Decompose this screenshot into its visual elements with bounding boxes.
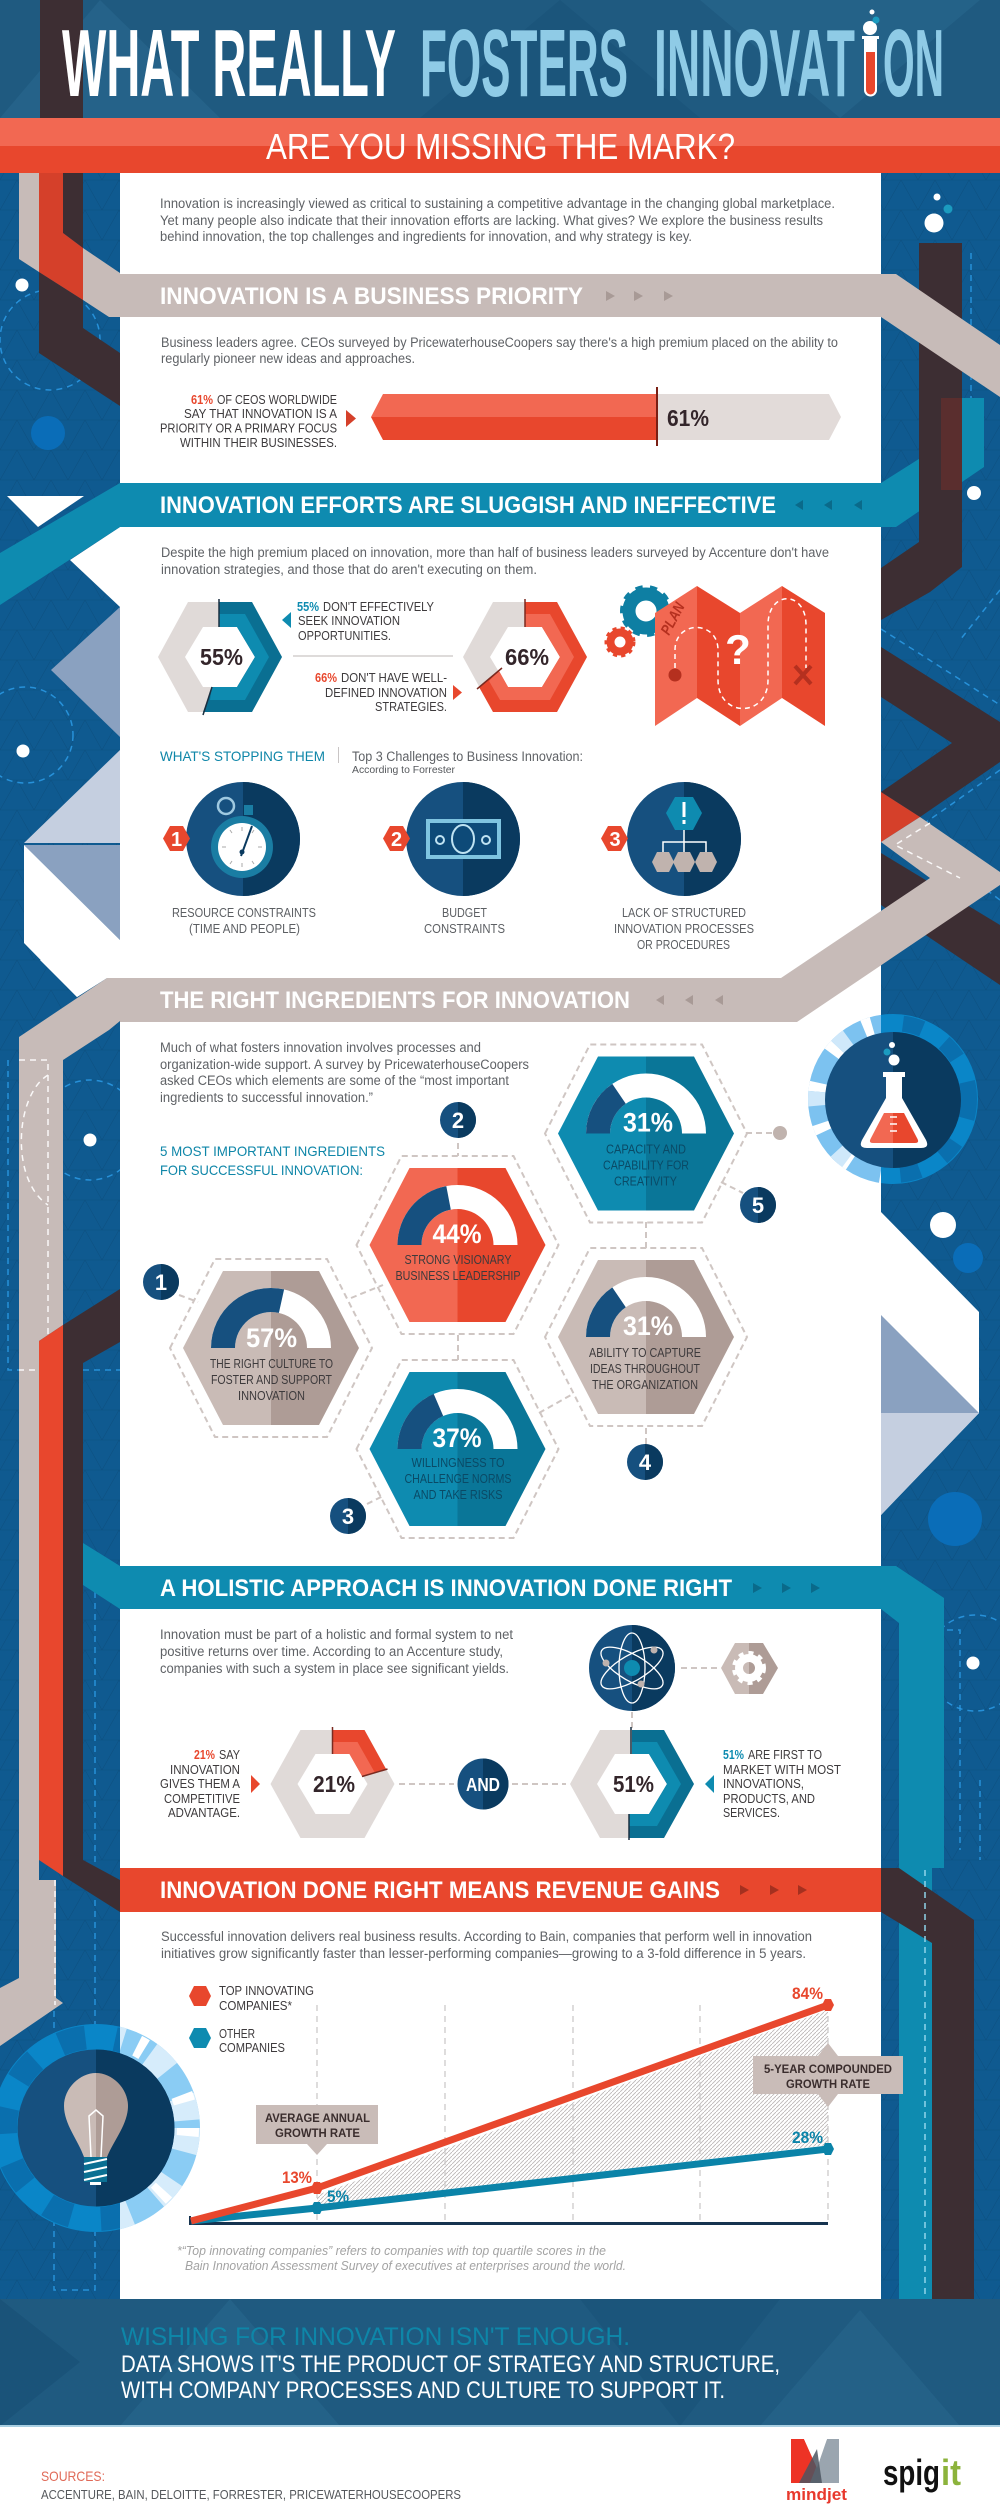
callout: 5-year compounded growth rate: 5-YEAR COMPOUNDED [764,2062,892,2076]
logo: mindjet: mindjet [786,2485,847,2504]
section 3 paragraph: Much of what fosters innovation involves processes and [160,1040,481,1055]
title: WHAT REALLY [62,10,396,117]
bar chart: 61 percent [371,387,841,446]
icon: stopwatch challenge 1: 1 [171,829,182,851]
subheading: 5 most important ingredients [160,1143,385,1178]
legend: COMPANIES [219,2040,285,2055]
callout: 51 percent text [705,1747,841,1820]
section 2 paragraph [161,545,829,577]
callout: 66 percent text [315,670,462,714]
callout: 61 percent of CEOs [160,392,356,450]
callout: 51 percent text: ARE FIRST TO [748,1747,822,1762]
callout: 61 percent of CEOs: OF CEOS WORLDWIDE [217,392,337,407]
hexagon: 44 percent visionary leadership [356,1156,558,1334]
callout: 21 percent text: SAY [219,1747,240,1762]
logo: spigit: spig [883,2452,940,2493]
number badges: 1 [155,1270,167,1295]
section 5 paragraph: Successful innovation delivers real business results. According to Bain, companies that perform well in innovation [161,1929,812,1944]
chart: 51 percent hexagon: 51% [613,1771,654,1797]
callout: 21 percent text [160,1747,260,1820]
hexagon: 31 percent capture ideas: IDEAS THROUGHOUT [590,1361,700,1376]
legend: OTHER [219,2026,255,2041]
subheading: what's stopping them: Top 3 Challenges to Business Innovation: [352,749,583,764]
icon: org chart challenge 3 [601,782,741,896]
section 4 paragraph [160,1627,513,1676]
chart: 21 percent hexagon [270,1727,394,1838]
section 4 paragraph: Innovation must be part of a holistic and formal system to net [160,1627,513,1642]
decorative dots [16,194,983,1670]
badge: and: AND [466,1775,500,1795]
callout: 21 percent text: 21% [194,1747,215,1762]
callout: 61 percent of CEOs: PRIORITY OR A PRIMARY FOCUS [160,420,337,436]
subtitle band [0,118,1000,173]
icon: banknote challenge 2: 2 [391,829,402,851]
callout: 55 percent text: SEEK INNOVATION [298,613,400,628]
chart: 55 percent hexagon: 55% [200,644,243,670]
line chart: growth: 13% [282,2168,312,2187]
icon: test tube in title [862,10,880,96]
number badges: 5 [752,1193,764,1218]
section 4 paragraph: positive returns over time. According to an Accenture study, [160,1644,503,1659]
callout: average annual growth rate: AVERAGE ANNUAL [265,2111,370,2125]
connector dashes [179,1126,787,1504]
hexagon: 57 percent right culture [170,1259,372,1437]
chart: 66 percent hexagon: 66% [505,644,549,670]
chart: 21 percent hexagon: 21% [313,1771,355,1797]
section 4 heading band [83,1543,881,1609]
section 3 paragraph [160,1040,529,1105]
challenge labels: RESOURCE CONSTRAINTS [172,905,316,920]
hexagon: 37 percent challenge norms: 37% [432,1423,482,1453]
number badges [143,1102,776,1534]
ribbon: grey zigzag leading to section three [120,817,1000,1022]
chart: 66 percent hexagon [463,599,587,712]
section 5 heading band: INNOVATION DONE RIGHT MEANS REVENUE GAINS [160,1877,720,1904]
section 1 heading band: INNOVATION IS A BUSINESS PRIORITY [160,283,583,310]
connector dashes: holistic [399,1668,717,1784]
intro text: Yet many people also indicate that their innovation efforts are lacking. What gives? We explore the business results [160,213,823,228]
footnote: *“Top innovating companies” refers to companies with top quartile scores in the [177,2243,606,2258]
subheading: 5 most important ingredients: 5 MOST IMPORTANT INGREDIENTS [160,1143,385,1159]
hexagon: 37 percent challenge norms: CHALLENGE NORMS [404,1471,512,1486]
section 3 paragraph: asked CEOs which elements are some of the “most important [160,1073,509,1088]
decorative dot over right band [967,486,981,500]
footnote [177,2243,626,2273]
hexagon: 37 percent challenge norms: AND TAKE RISKS [414,1487,503,1502]
callout: 5-year compounded growth rate [753,2043,903,2107]
logo: mindjet [786,2439,847,2504]
section 5 heading band [120,1868,881,1912]
line chart: growth: 28% [792,2128,823,2147]
section 2 heading band [0,483,881,605]
hexagon: 44 percent visionary leadership: STRONG VISIONARY [404,1252,512,1267]
section 5 paragraph [161,1929,812,1961]
subheading: what's stopping them [160,747,583,776]
callout: average annual growth rate [256,2105,378,2155]
section 1 heading band [120,274,1000,397]
callout: 51 percent text: 51% [723,1747,744,1762]
sources [41,2468,461,2502]
callout: 5-year compounded growth rate: GROWTH RATE [786,2077,870,2091]
closing banner [0,2299,1000,2427]
hexagon: 31 percent capture ideas [545,1248,747,1426]
ribbon: left grey vertical band [0,978,120,2046]
callout: 51 percent text: SERVICES. [723,1805,780,1820]
callout: 55 percent text: 55% [297,599,319,614]
logo: spigit: it [941,2452,961,2493]
icon: flask [808,1014,978,1184]
callout: 61 percent of CEOs: 61% [191,392,213,407]
sources: SOURCES: [41,2468,105,2484]
ribbon: left lower red and dark bands [39,1289,120,1912]
icon: gears [606,588,669,656]
hexagon: 57 percent right culture: 57% [246,1323,297,1353]
chart: 55 percent hexagon [158,599,282,715]
header banner [0,0,1000,118]
icon: gear hexagon [721,1643,778,1694]
white content panel [120,173,881,2300]
chart: 51 percent hexagon [570,1727,694,1840]
section 1 paragraph [161,335,838,366]
section 2 paragraph: Despite the high premium placed on innovation, more than half of business leaders surveyed by Accenture don't have [161,545,829,560]
number badges: 3 [342,1504,354,1529]
callout: 61 percent of CEOs: SAY THAT INNOVATION IS A [184,406,337,421]
callout: 66 percent text: DEFINED INNOVATION [325,685,447,700]
badge: and [458,1758,509,1810]
intro text: behind innovation, the top challenges and ingredients for innovation, and why strategy is key. [160,229,692,244]
callout: 21 percent text: INNOVATION [170,1762,240,1777]
hexagon: 44 percent visionary leadership: 44% [432,1219,482,1249]
closing banner: WITH COMPANY PROCESSES AND CULTURE TO SUPPORT IT. [121,2377,725,2404]
callout: 21 percent text: COMPETITIVE [164,1791,240,1806]
hexagon: 31 percent capacity for creativity: CREATIVITY [614,1174,677,1188]
callout: 51 percent text: MARKET WITH MOST [723,1762,841,1777]
icon: stopwatch challenge 1 [163,782,300,896]
icon: folded plan map: ? [725,626,751,673]
challenge labels: CONSTRAINTS [424,921,505,936]
legend: COMPANIES* [219,1998,292,2013]
callout: average annual growth rate: GROWTH RATE [275,2126,360,2140]
title: FOSTERS [420,10,628,117]
section 3 paragraph: ingredients to successful innovation.” [160,1090,373,1105]
challenge labels: (TIME AND PEOPLE) [189,921,300,936]
hexagon: 31 percent capture ideas: ABILITY TO CAPTURE [589,1345,701,1360]
hexagon: 57 percent right culture: INNOVATION [238,1388,305,1403]
hexagon: 31 percent capacity for creativity: CAPABILITY FOR [603,1158,689,1172]
hexagon: 31 percent capacity for creativity [545,1044,747,1222]
ribbon: left upper bands [19,173,120,406]
section 2 paragraph: innovation strategies, and those that do aren't executing on them. [161,562,537,577]
callout: 21 percent text: ADVANTAGE. [168,1805,240,1820]
ribbon: right dark zigzag band with teal section [881,243,1000,985]
hexagon: 31 percent capacity for creativity: CAPACITY AND [606,1142,686,1156]
callout: 66 percent text: 66% [315,670,337,685]
hexagon: 37 percent challenge norms: WILLINGNESS TO [412,1455,504,1470]
hexagon: 57 percent right culture: THE RIGHT CULTURE TO [210,1356,333,1371]
callout: 66 percent text: DON'T HAVE WELL- [341,670,447,685]
section 3 heading text: THE RIGHT INGREDIENTS FOR INNOVATION [160,987,630,1014]
sources: ACCENTURE, BAIN, DELOITTE, FORRESTER, PRICEWATERHOUSECOOPERS [41,2487,461,2502]
icon: atom [589,1625,675,1711]
subheading: 5 most important ingredients: FOR SUCCESSFUL INNOVATION: [160,1162,363,1178]
line chart: growth [189,1984,834,2225]
icon: banknote challenge 2 [383,782,520,896]
section 2 heading band: INNOVATION EFFORTS ARE SLUGGISH AND INEFFECTIVE [160,492,776,519]
intro text [160,196,835,244]
callout: 51 percent text: INNOVATIONS, [723,1776,804,1791]
challenge labels [172,905,754,952]
footnote: Bain Innovation Assessment Survey of executives at enterprises around the world. [185,2258,626,2273]
callout: 21 percent text: GIVES THEM A [160,1776,240,1791]
section 1 paragraph: Business leaders agree. CEOs surveyed by PricewaterhouseCoopers say there's a high premium placed on the ability to [161,335,838,350]
section 1 paragraph: regularly pioneer new ideas and approaches. [161,351,415,366]
callout: 55 percent text: OPPORTUNITIES. [298,628,391,643]
number badges: 2 [452,1108,464,1133]
subheading: what's stopping them: According to Forrester [352,765,456,776]
line chart: growth: 84% [792,1984,823,2003]
right white geometric notch [881,1000,979,1515]
callout: 66 percent text: STRATEGIES. [375,699,447,714]
hexagon: 31 percent capture ideas: THE ORGANIZATION [592,1377,698,1392]
line chart: growth: 5% [327,2187,349,2206]
legend [189,1983,314,2055]
bar chart: 61 percent: 61% [667,405,709,431]
icon: light bulb [0,2024,200,2232]
hexagon: 44 percent visionary leadership: BUSINESS LEADERSHIP [396,1268,520,1283]
callout: 55 percent text: DON'T EFFECTIVELY [323,599,434,614]
icon: org chart challenge 3: 3 [609,829,621,851]
number badges: 4 [639,1450,652,1475]
closing banner: WISHING FOR INNOVATION ISN'T ENOUGH. [121,2323,630,2351]
left white geometric notch [7,496,120,997]
hexagon: 31 percent capture ideas: 31% [623,1311,673,1341]
hexagon: 37 percent challenge norms [356,1360,558,1538]
callout: 51 percent text: PRODUCTS, AND [723,1791,815,1806]
ribbon: white dashed overlay on grey band [19,823,960,2005]
section 4 heading band: A HOLISTIC APPROACH IS INNOVATION DONE RIGHT [160,1575,732,1602]
bottom white strip [0,2427,1000,2517]
section 4 paragraph: companies with such a system in place see significant yields. [160,1661,509,1676]
hexagon: 57 percent right culture: FOSTER AND SUPPORT [211,1372,332,1387]
section 3 paragraph: organization-wide support. A survey by PricewaterhouseCoopers [160,1057,529,1072]
icon: folded plan map [655,586,825,726]
challenge labels: INNOVATION PROCESSES [614,921,754,936]
intro text: Innovation is increasingly viewed as critical to sustaining a competitive advantage in the changing global marketplace. [160,196,835,211]
subheading: what's stopping them: WHAT'S STOPPING THEM [160,748,325,764]
legend: TOP INNOVATING [219,1983,314,1998]
section 5 paragraph: initiatives grow significantly faster than lesser-performing companies—growing to a 3-fold difference in 5 years. [161,1946,806,1961]
challenge labels: OR PROCEDURES [637,937,730,952]
callout: 61 percent of CEOs: WITHIN THEIR BUSINESSES. [180,435,337,450]
callout: 55 percent text [282,599,434,643]
challenge labels: LACK OF STRUCTURED [622,905,746,920]
challenge labels: BUDGET [442,905,487,920]
ribbon: right lower teal and dark bands [881,1566,974,2299]
subtitle band: ARE YOU MISSING THE MARK? [266,126,735,167]
closing banner: DATA SHOWS IT'S THE PRODUCT OF STRATEGY AND STRUCTURE, [121,2351,780,2378]
icon: folded plan map: PLAN [658,599,689,638]
hexagon: 31 percent capacity for creativity: 31% [623,1108,673,1138]
